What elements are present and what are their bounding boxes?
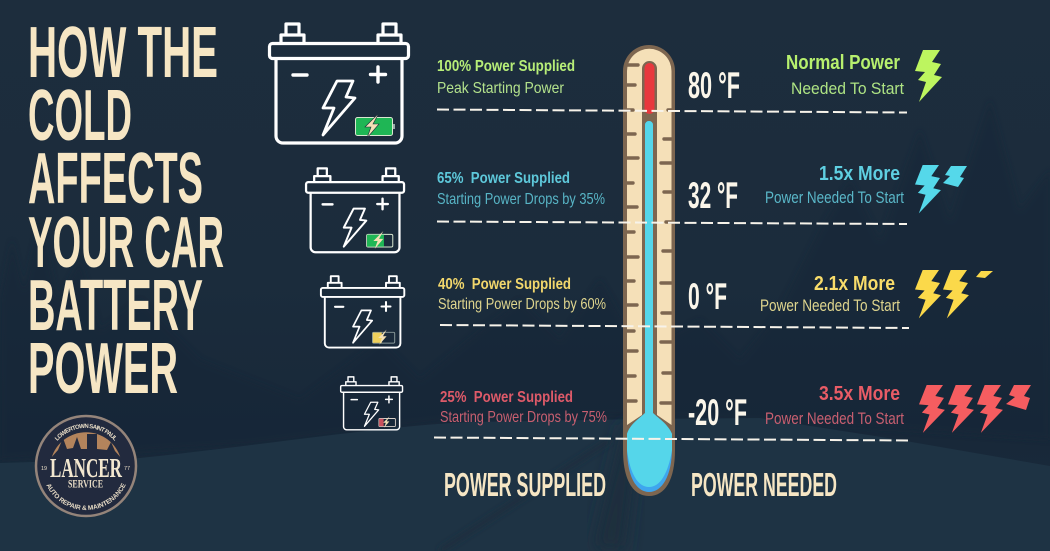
row 3 right text: Power Needed To Start [760,297,900,315]
label: power supplied: POWER SUPPLIED [444,466,606,503]
row 1 right text [786,52,904,98]
title: POWER [28,329,178,409]
row 3 left text: 40% Power Supplied [438,276,571,293]
row 3 right text: 2.1x More [814,273,895,295]
row 4 left text: 25% Power Supplied [440,389,573,406]
temperature labels: 0 °F [688,276,727,317]
title: BATTERY [28,266,203,346]
dashed separators [434,110,910,440]
title: YOUR CAR [28,203,224,283]
icon: yellow bolts [915,270,993,318]
logo: Lancer Service badge: 77 [124,466,130,472]
title [28,13,224,409]
row 3 right text [760,273,900,315]
logo: Lancer Service badge [34,414,138,518]
row 4 right text: 3.5x More [819,383,900,405]
row 2 left text [437,170,605,208]
row 2 right text: Power Needed To Start [765,189,904,207]
battery icon: 25% [341,377,403,430]
row 4 left text: Starting Power Drops by 75% [440,409,607,426]
logo: Lancer Service badge: LANCER [50,453,122,483]
row 1 left text [437,58,575,97]
row 1 right text: Normal Power [786,52,900,74]
temperature labels: -20 °F [688,392,747,433]
row 2 right text: 1.5x More [819,163,900,185]
row 3 left text [438,276,606,313]
title: COLD [28,76,132,156]
battery icon: 40% [321,276,404,348]
logo: Lancer Service badge: SERVICE [68,476,103,490]
temperature labels: 32 °F [688,175,738,216]
title: HOW THE [28,13,218,93]
thermometer [623,45,675,496]
row 4 right text: Power Needed To Start [765,410,904,428]
icon: green bolt [915,50,942,102]
row 1 left text: 100% Power Supplied [437,58,575,75]
logo: Lancer Service badge: 19 [41,466,47,472]
temperature labels: 80 °F [688,65,740,106]
battery icon: 65% [306,168,404,252]
icon: blue bolts [915,165,967,213]
row 4 right text [765,383,904,428]
logo: Lancer Service badge: AUTO REPAIR & MAINTENANCE [46,482,126,510]
row 1 right text: Needed To Start [791,80,904,98]
title: AFFECTS [28,139,203,219]
row 1 left text: Peak Starting Power [437,80,565,97]
logo: Lancer Service badge: LOWERTOWN SAINT PAUL [54,424,116,441]
label: power needed: POWER NEEDED [691,466,837,503]
row 3 left text: Starting Power Drops by 60% [438,296,606,313]
battery icon: 100% [270,24,408,143]
row 2 left text: 65% Power Supplied [437,170,570,187]
row 4 left text [440,389,607,426]
icon: red bolts [919,385,1031,433]
row 2 right text [765,163,904,207]
temperature labels [688,65,747,433]
row 2 left text: Starting Power Drops by 35% [437,191,605,208]
